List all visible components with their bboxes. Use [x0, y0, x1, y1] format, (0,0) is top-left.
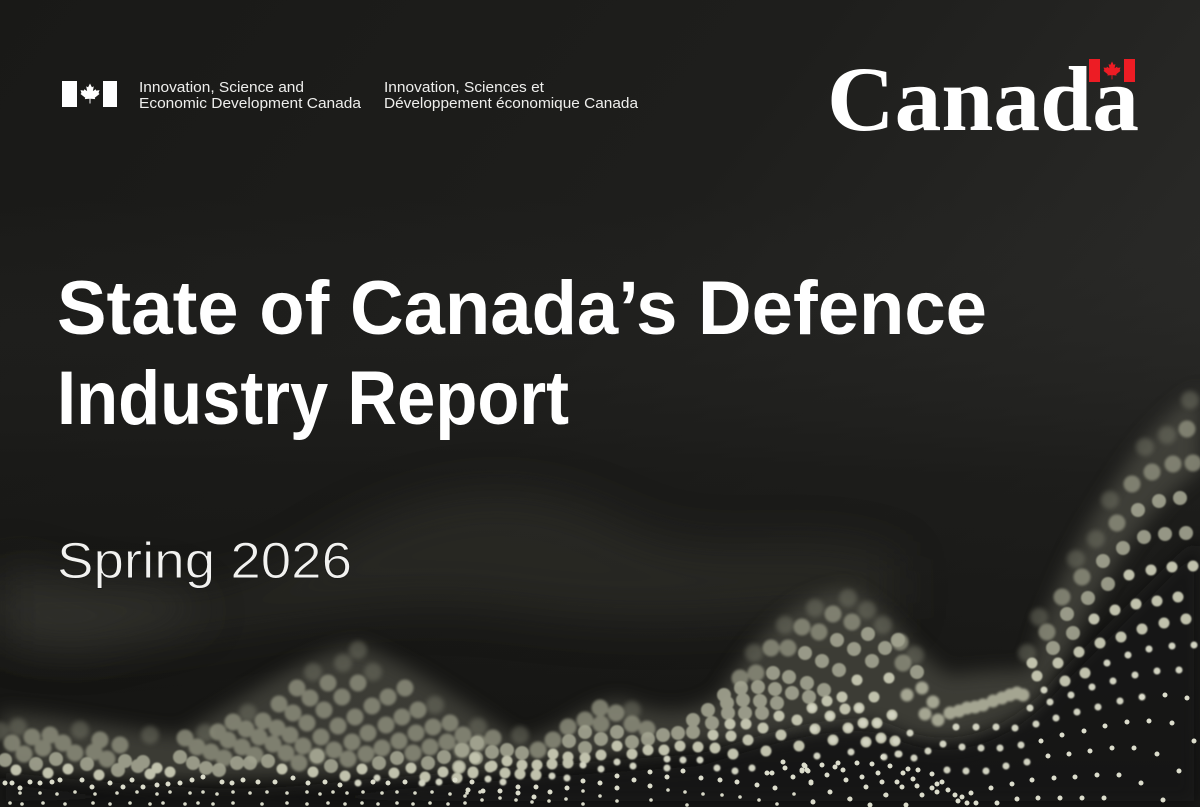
- header: department signature: [62, 80, 638, 112]
- title: Industry Report: [57, 356, 569, 441]
- english department name: Innovation, Science and: [139, 80, 304, 96]
- mid blurred dots: [12, 429, 1193, 763]
- title: [57, 266, 987, 441]
- crisp small dots: [5, 695, 1194, 805]
- icon: federal identity flag symbol: [62, 81, 117, 107]
- far blurred dots: [0, 400, 1190, 735]
- english department name: Economic Development Canada: [139, 96, 361, 112]
- dotted wave landscape: [0, 390, 1200, 807]
- english department name: [139, 80, 361, 112]
- valley bright dot string: [907, 688, 1023, 720]
- crisp medium dots: [358, 645, 1194, 783]
- french department name: Développement économique Canada: [384, 96, 638, 112]
- french department name: Innovation, Sciences et: [384, 80, 544, 96]
- date subtitle: Spring 2026: [57, 532, 352, 589]
- icon: red flag: [1089, 59, 1135, 82]
- ridge glow: [0, 390, 1200, 780]
- dark ground under ridge: [0, 540, 1200, 807]
- near blurred dots: [5, 498, 1186, 770]
- french department name: [384, 80, 638, 112]
- bright soft dots: [16, 566, 1193, 778]
- title: State of Canada’s Defence: [57, 266, 987, 351]
- canada wordmark: Canada: [827, 48, 1139, 150]
- crisp tiny dots: [10, 790, 885, 805]
